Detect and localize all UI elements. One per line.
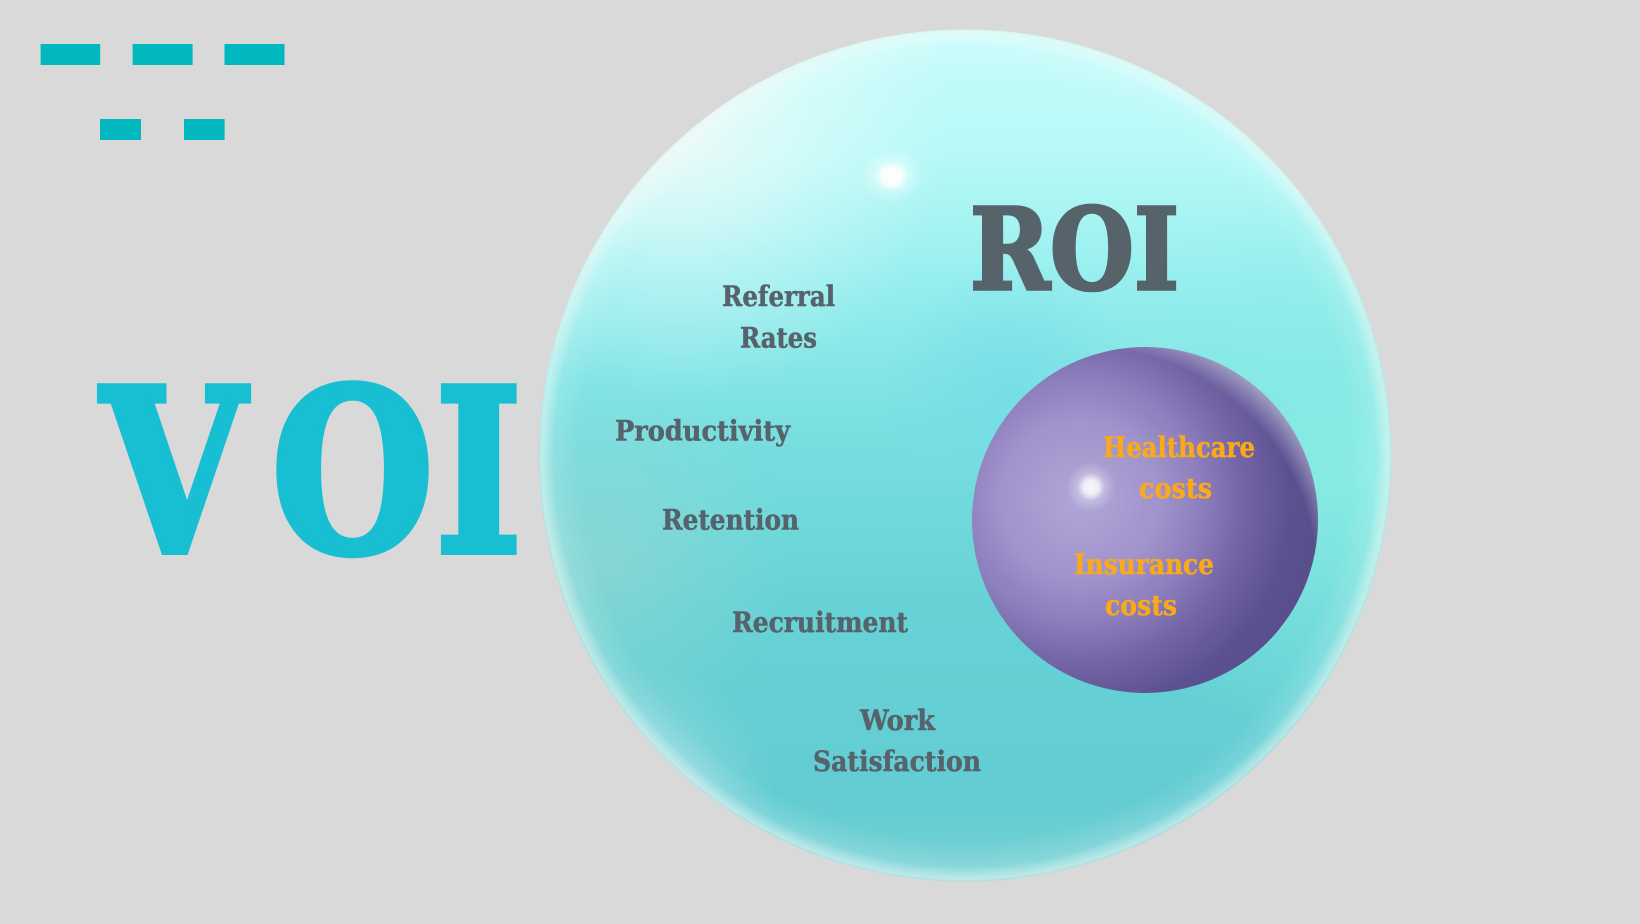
label: Healthcare costs: Healthcare [1103, 431, 1255, 464]
large teal sphere: ROI [539, 30, 1391, 882]
heading: ROI: ROI [970, 185, 1179, 316]
label: Work Satisfaction: Work [859, 704, 936, 737]
purple sphere highlight [1066, 462, 1116, 512]
label: Recruitment: Recruitment [732, 606, 908, 639]
sphere highlight [860, 148, 924, 204]
heading: VOI: VOI [99, 339, 522, 605]
label: Referral Rates: Rates [740, 322, 817, 354]
label: Retention: Retention [662, 504, 799, 536]
small purple sphere [972, 347, 1318, 693]
label: Work Satisfaction [813, 704, 981, 778]
label: Insurance costs [1074, 548, 1214, 622]
label: Referral Rates: Referral [722, 280, 835, 313]
label: Insurance costs: Insurance [1074, 548, 1214, 581]
label: Healthcare costs: costs [1139, 472, 1212, 505]
label: Productivity: Productivity [615, 414, 791, 448]
label: Healthcare costs [1103, 431, 1255, 505]
label: Insurance costs: costs [1105, 589, 1177, 622]
label: Referral Rates [722, 280, 835, 354]
label: Work Satisfaction: Satisfaction [813, 745, 981, 778]
decorative dash marks, top left [41, 44, 284, 140]
